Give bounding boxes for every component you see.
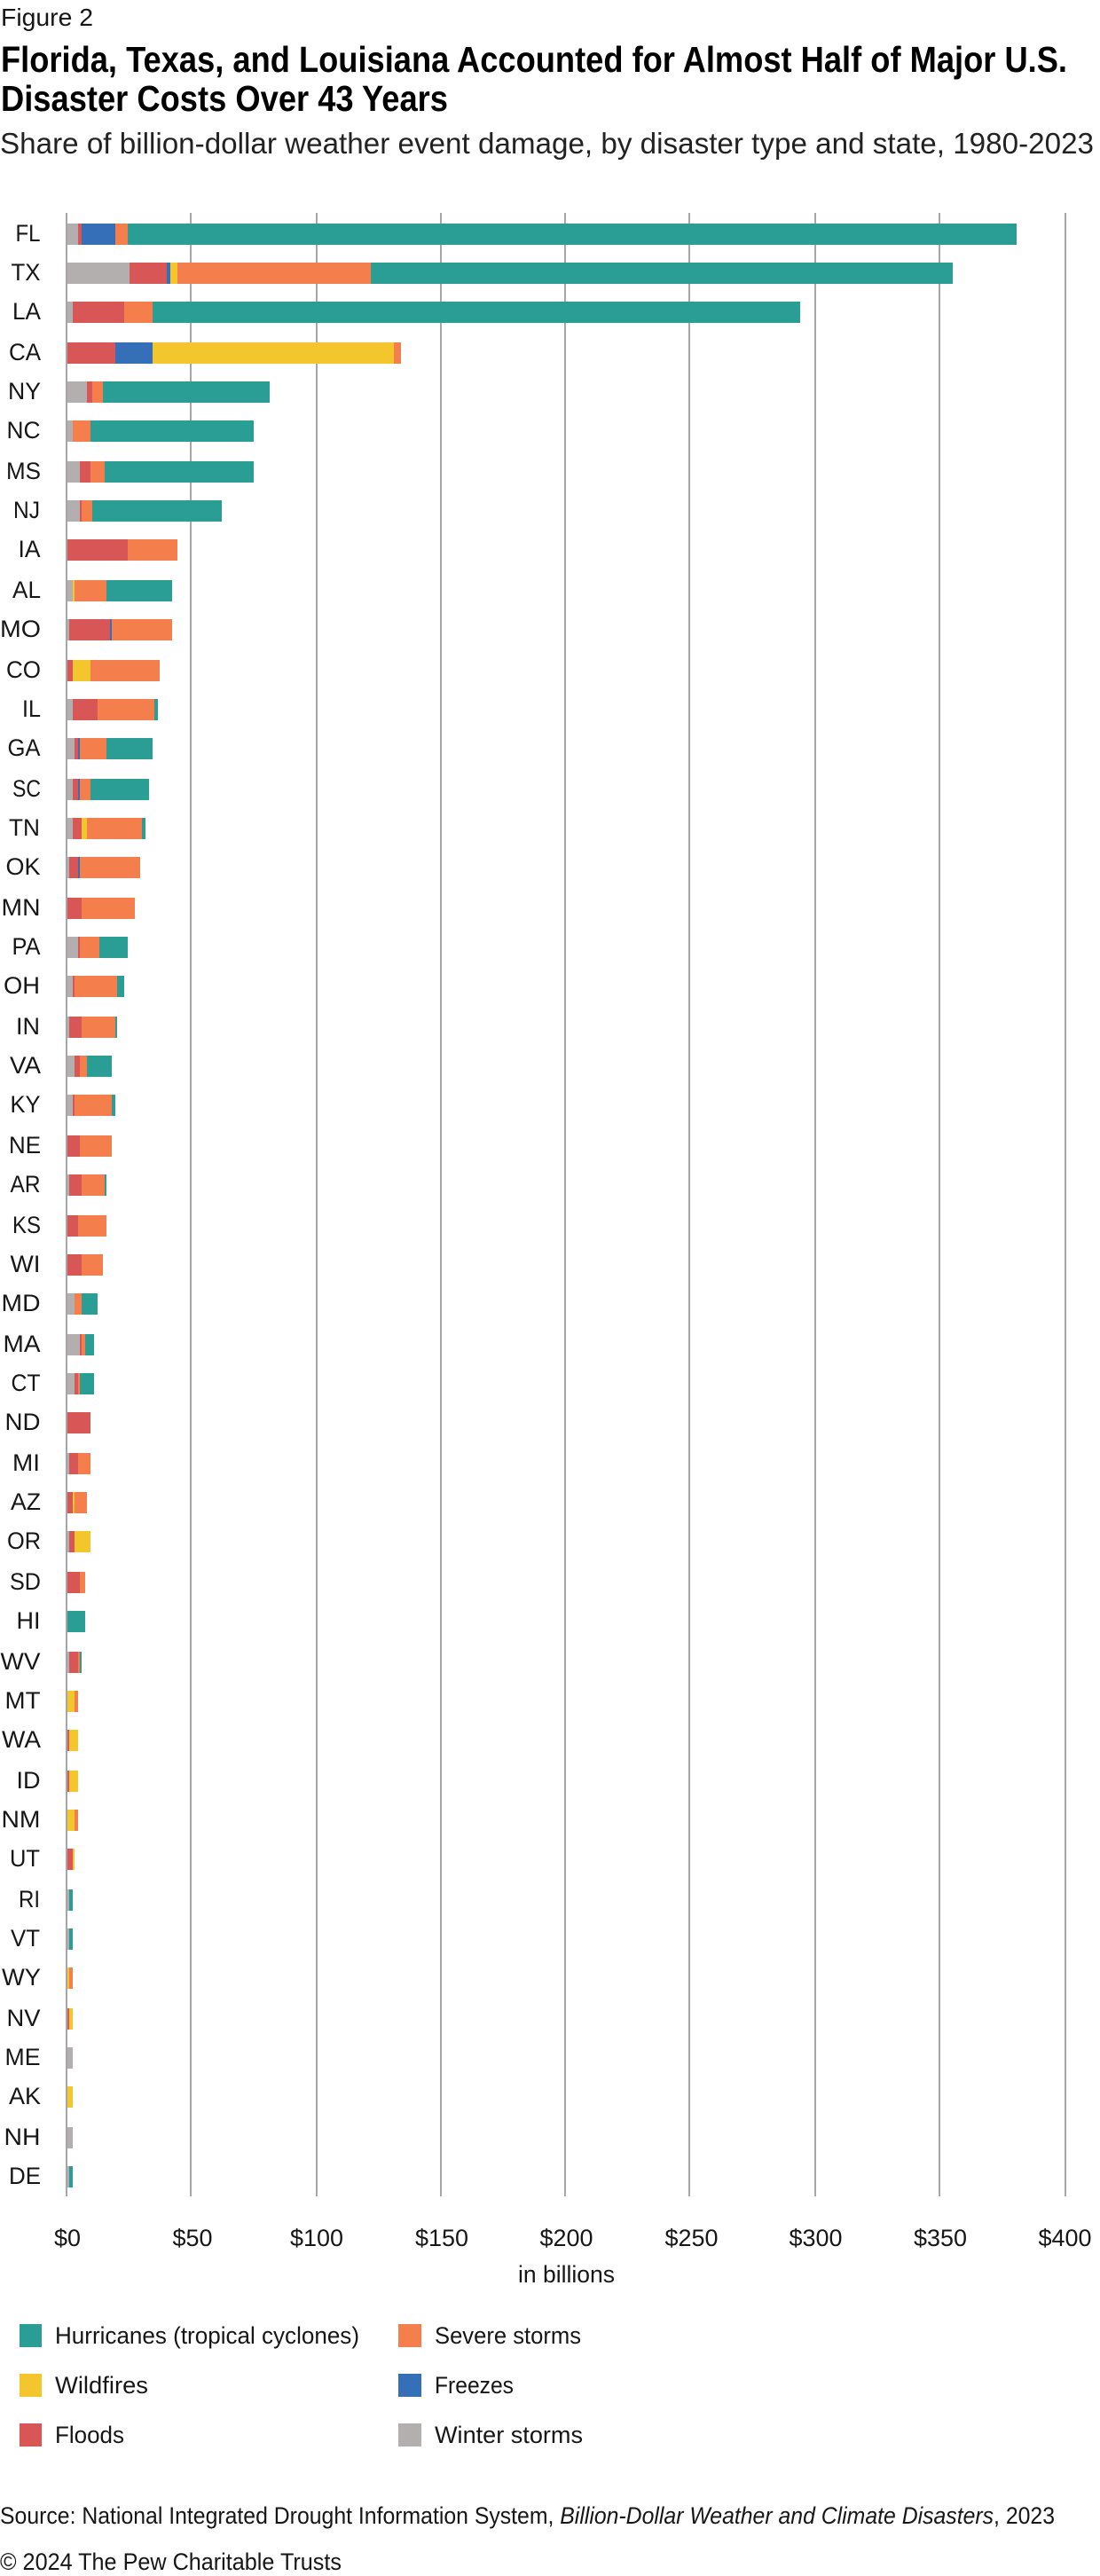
row: VT: VT xyxy=(11,1925,40,1952)
legend item: wildfires: Wildfires xyxy=(55,2372,148,2399)
row: MI xyxy=(12,1449,90,1476)
row: KY xyxy=(11,1091,115,1118)
row: WY xyxy=(2,1964,73,1991)
row: RI: RI xyxy=(19,1886,40,1912)
row: WV: WV xyxy=(0,1648,41,1675)
row: FL: FL xyxy=(16,220,41,247)
row: MA xyxy=(4,1331,94,1357)
title xyxy=(1,39,1067,119)
row: IN xyxy=(16,1013,117,1040)
row: KS xyxy=(12,1212,106,1238)
legend item: hurricanes: Hurricanes (tropical cyclones) xyxy=(55,2322,359,2349)
copyright: © 2024 The Pew Charitable Trusts xyxy=(0,2549,342,2575)
row: NJ xyxy=(13,497,222,523)
row: CA xyxy=(9,339,401,365)
row: ID xyxy=(16,1767,78,1794)
row: ID: ID xyxy=(16,1767,41,1794)
row: SD: SD xyxy=(10,1568,41,1595)
row: MD: MD xyxy=(2,1290,41,1316)
row: MD xyxy=(2,1290,98,1316)
row: AR: AR xyxy=(11,1171,41,1198)
x axis tick labels: $300 xyxy=(790,2225,843,2251)
row: NE xyxy=(9,1132,112,1158)
x axis tick labels: $50 xyxy=(172,2225,213,2251)
row: IA xyxy=(18,536,177,562)
row: OH: OH xyxy=(4,972,40,999)
row: OR xyxy=(7,1528,90,1554)
row: MO: MO xyxy=(0,616,41,642)
row: ME: ME xyxy=(5,2044,41,2070)
row: IL: IL xyxy=(22,695,41,722)
row: FL xyxy=(16,220,1017,247)
row: AL: AL xyxy=(12,577,41,603)
row: TX xyxy=(11,259,953,286)
row: NC xyxy=(7,417,254,444)
row: TN: TN xyxy=(9,814,40,841)
row: WY: WY xyxy=(2,1964,41,1991)
row: AK: AK xyxy=(9,2083,41,2109)
x axis tick labels: $350 xyxy=(914,2225,967,2251)
stacked bar chart xyxy=(0,213,1066,2196)
row: AZ xyxy=(11,1488,87,1515)
row: ME xyxy=(5,2044,73,2070)
title: Disaster Costs Over 43 Years xyxy=(1,78,448,119)
row: LA xyxy=(12,298,800,325)
row: MN: MN xyxy=(2,894,41,921)
row: NM: NM xyxy=(2,1806,41,1833)
row: KY: KY xyxy=(11,1091,41,1118)
x axis tick labels: $400 xyxy=(1038,2225,1091,2251)
row: IN: IN xyxy=(16,1013,40,1040)
x axis tick labels: $0 xyxy=(54,2225,81,2251)
row: RI xyxy=(19,1886,73,1912)
row: MT: MT xyxy=(5,1687,40,1714)
legend xyxy=(20,2322,583,2448)
x axis tick labels: $250 xyxy=(665,2225,719,2251)
x axis tick labels xyxy=(54,2225,1091,2251)
row: SC: SC xyxy=(12,775,41,802)
row: NY: NY xyxy=(8,378,41,404)
source note: Source: National Integrated Drought Information System, Billion-Dollar Weather and Climate Disasters, 2023 xyxy=(0,2502,1055,2529)
row: WI: WI xyxy=(11,1251,41,1277)
x axis tick labels: $200 xyxy=(539,2225,593,2251)
row: SD xyxy=(10,1568,85,1595)
row: UT: UT xyxy=(10,1845,40,1872)
row: MN xyxy=(2,894,135,921)
row: NM xyxy=(2,1806,78,1833)
row: MS xyxy=(6,458,254,484)
row: KS: KS xyxy=(12,1212,41,1238)
figure label: Figure 2 xyxy=(1,4,93,31)
row: IL xyxy=(22,695,158,722)
row: NV xyxy=(7,2005,73,2031)
row: ND: ND xyxy=(5,1409,41,1435)
row: WA xyxy=(2,1726,78,1753)
row: CO: CO xyxy=(6,656,41,683)
legend item: floods: Floods xyxy=(55,2422,124,2448)
legend item: freezes: Freezes xyxy=(435,2372,514,2399)
legend item: winter storms: Winter storms xyxy=(435,2422,583,2448)
x axis tick labels: $150 xyxy=(415,2225,468,2251)
row: GA: GA xyxy=(7,734,41,761)
row: VT xyxy=(11,1925,73,1952)
row: AK xyxy=(9,2083,73,2109)
row: MI: MI xyxy=(12,1449,40,1476)
row: NY xyxy=(8,378,270,404)
row: GA xyxy=(7,734,153,761)
row: VA xyxy=(10,1052,112,1079)
x axis tick labels: $100 xyxy=(290,2225,343,2251)
row: NJ: NJ xyxy=(13,497,40,523)
row: LA: LA xyxy=(12,298,41,325)
row: OR: OR xyxy=(7,1528,41,1554)
legend item: freezes xyxy=(398,2372,514,2399)
row: CT: CT xyxy=(11,1370,41,1396)
row: NE: NE xyxy=(9,1132,41,1158)
row: NH xyxy=(4,2124,73,2150)
row: CO xyxy=(6,656,160,683)
row: AZ: AZ xyxy=(11,1488,41,1515)
row: CA: CA xyxy=(9,339,41,365)
row: CT xyxy=(11,1370,94,1396)
row: WA: WA xyxy=(2,1726,41,1753)
row: MO xyxy=(0,616,172,642)
row: AR xyxy=(11,1171,106,1198)
row: UT xyxy=(10,1845,75,1872)
row: AL xyxy=(12,577,172,603)
x axis unit label: in billions xyxy=(518,2261,615,2288)
legend item: floods xyxy=(20,2422,124,2448)
row: MS: MS xyxy=(6,458,41,484)
row: PA: PA xyxy=(12,933,41,960)
row: VA: VA xyxy=(10,1052,41,1079)
row: DE xyxy=(9,2163,73,2189)
subtitle: Share of billion-dollar weather event damage, by disaster type and state, 1980-2023 xyxy=(0,128,1094,161)
row: MA: MA xyxy=(4,1331,41,1357)
row: ND xyxy=(5,1409,90,1435)
row: OK xyxy=(5,853,140,880)
row: DE: DE xyxy=(9,2163,41,2189)
row: IA: IA xyxy=(18,536,41,562)
row: NV: NV xyxy=(7,2005,41,2031)
row: OK: OK xyxy=(5,853,41,880)
row: WI xyxy=(11,1251,103,1277)
row: NC: NC xyxy=(7,417,41,444)
row: TN xyxy=(9,814,145,841)
row: TX: TX xyxy=(11,259,41,286)
row: WV xyxy=(0,1648,82,1675)
row: HI: HI xyxy=(16,1607,41,1634)
row: PA xyxy=(12,933,128,960)
row: HI xyxy=(16,1607,85,1634)
row: MT xyxy=(5,1687,78,1714)
legend item: severe storms: Severe storms xyxy=(435,2322,581,2349)
row: SC xyxy=(12,775,149,802)
row: OH xyxy=(4,972,124,999)
row: NH: NH xyxy=(4,2124,41,2150)
